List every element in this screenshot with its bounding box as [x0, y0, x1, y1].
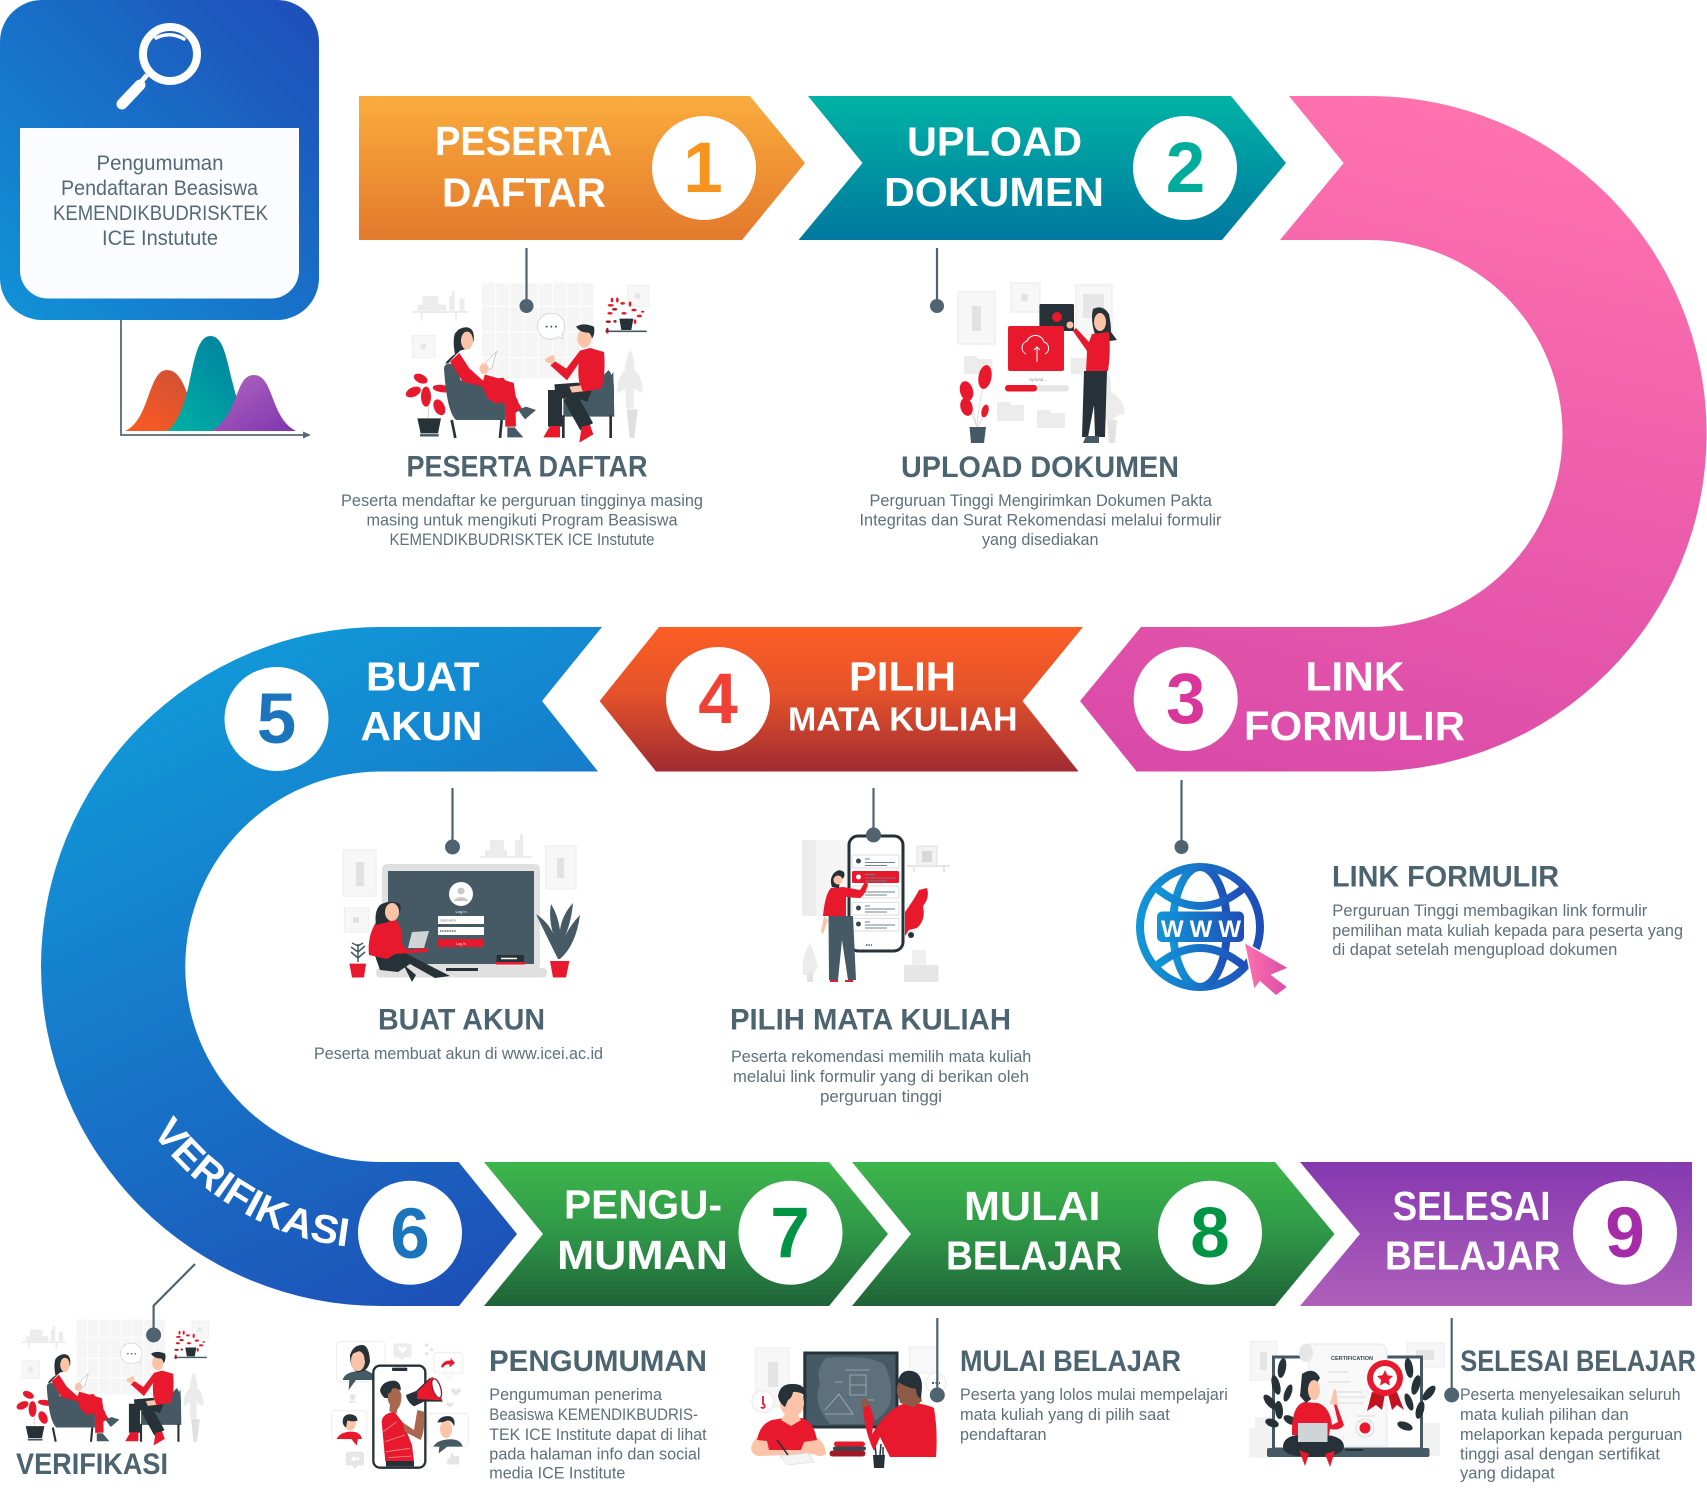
illustration: consultation for Peserta Daftar	[404, 283, 649, 443]
text block: Mulai Belajar: pendaftaran	[960, 1426, 1046, 1444]
step 2 banner: Upload Dokumen	[798, 96, 1286, 240]
connector pin: step 6	[146, 1264, 195, 1342]
text block: Pengumuman	[489, 1345, 707, 1483]
panel: announcement card	[0, 0, 319, 320]
step 4 banner: Pilih Mata Kuliah: MATA KULIAH	[788, 700, 1018, 738]
text block: Selesai Belajar: yang didapat	[1460, 1465, 1555, 1483]
step 3 banner: Link Formulir curve	[1080, 96, 1707, 772]
text block: Selesai Belajar: Peserta menyelesaikan seluruh	[1460, 1386, 1680, 1404]
step 1 banner: Peserta Daftar: DAFTAR	[442, 170, 606, 216]
step 5 and 6 banner: Buat Akun and Verifikasi curve: BUAT	[366, 654, 480, 700]
text block: Selesai Belajar: mata kuliah pilihan dan	[1460, 1406, 1629, 1424]
illustration: create account on laptop: Username	[440, 918, 456, 922]
text block: Pilih Mata Kuliah: PILIH MATA KULIAH	[730, 1004, 1011, 1036]
text block: Mulai Belajar	[960, 1345, 1228, 1444]
illustration: upload documents: Upload...	[1029, 377, 1047, 382]
text block: Peserta Daftar: Peserta mendaftar ke perguruan tingginya masing	[341, 492, 703, 510]
connector pin: step 2	[930, 248, 944, 313]
text block: Upload Dokumen	[860, 451, 1222, 549]
text block: Peserta Daftar	[341, 450, 703, 549]
card text: ICE Instutute	[102, 227, 218, 250]
icon: www globe with cursor	[1140, 867, 1289, 996]
text block: Pengumuman: Beasiswa KEMENDIKBUDRIS-	[489, 1406, 698, 1424]
text block: Selesai Belajar: melaporkan kepada perguruan	[1460, 1426, 1682, 1444]
text block: Pengumuman: Pengumuman penerima	[489, 1386, 663, 1404]
icon: magnifying glass	[122, 27, 197, 104]
text block: Pengumuman: media ICE Institute	[489, 1465, 625, 1483]
illustration: certificate on laptop	[1249, 1342, 1444, 1467]
text block: Pengumuman: pada halaman info dan social	[489, 1445, 700, 1463]
illustration: create account on laptop: Log In	[455, 909, 467, 914]
step 9 banner: Selesai Belajar	[1300, 1162, 1692, 1306]
text block: Pengumuman: TEK ICE Institute dapat di lihat	[489, 1426, 707, 1444]
card white text panel	[20, 128, 299, 298]
step 5 and 6 banner: Buat Akun and Verifikasi curve: 5	[257, 680, 296, 759]
step 9 banner: Selesai Belajar: 9	[1605, 1194, 1645, 1273]
step 5 and 6 banner: Buat Akun and Verifikasi curve: AKUN	[360, 703, 482, 749]
text block: Selesai Belajar	[1460, 1345, 1696, 1483]
text block: Link Formulir: LINK FORMULIR	[1332, 860, 1559, 894]
step 8 banner: Mulai Belajar: 8	[1190, 1194, 1230, 1273]
text block: Upload Dokumen: Perguruan Tinggi Mengirimkan Dokumen Pakta	[870, 492, 1213, 510]
illustration: upload documents	[958, 283, 1125, 443]
step 3 banner: Link Formulir curve: FORMULIR	[1244, 703, 1465, 749]
step 4 banner: Pilih Mata Kuliah: 4	[698, 660, 738, 739]
connector pin: step 9	[1444, 1318, 1459, 1402]
step 3 banner: Link Formulir curve: 3	[1166, 660, 1205, 739]
step 9 banner: Selesai Belajar: BELAJAR	[1385, 1232, 1560, 1278]
step 4 banner: Pilih Mata Kuliah: PILIH	[849, 654, 956, 700]
text block: Peserta Daftar: PESERTA DAFTAR	[406, 450, 648, 484]
step 2 banner: Upload Dokumen: DOKUMEN	[884, 169, 1104, 215]
connector pin: step 4	[866, 788, 881, 842]
illustration: create account on laptop	[343, 834, 580, 982]
text block: Pilih Mata Kuliah: melalui link formulir yang di berikan oleh	[733, 1068, 1029, 1086]
step 8 banner: Mulai Belajar: BELAJAR	[946, 1232, 1122, 1278]
connector pin: step 5	[445, 788, 460, 854]
illustration: students at blackboard	[751, 1347, 946, 1468]
text block: Link Formulir: di dapat setelah mengupload dokumen	[1332, 941, 1617, 959]
connector pin: step 8	[930, 1318, 945, 1402]
step 9 banner: Selesai Belajar: SELESAI	[1392, 1183, 1550, 1229]
card text: KEMENDIKBUDRISKTEK	[53, 202, 268, 225]
text block: Link Formulir: pemilihan mata kuliah kepada para peserta yang	[1332, 922, 1683, 940]
step 5 and 6 banner: Buat Akun and Verifikasi curve: VERIFIKASI	[158, 1115, 348, 1246]
step 7 banner: Pengumuman: PENGU-	[564, 1182, 722, 1228]
card text: Pendaftaran Beasiswa	[61, 177, 258, 200]
text block: Link Formulir	[1332, 860, 1683, 959]
step 8 banner: Mulai Belajar	[852, 1162, 1334, 1306]
illustration: choose courses on phone	[802, 836, 950, 982]
text block: Link Formulir: Perguruan Tinggi membagikan link formulir	[1332, 902, 1648, 920]
step 8 banner: Mulai Belajar: MULAI	[964, 1183, 1100, 1229]
text block: Buat Akun: Peserta membuat akun di www.icei.ac.id	[314, 1045, 603, 1063]
text block: Pilih Mata Kuliah: perguruan tinggi	[820, 1088, 942, 1106]
text block: Peserta Daftar: masing untuk mengikuti Program Beasiswa	[366, 512, 678, 530]
text block: Pengumuman: PENGUMUMAN	[489, 1345, 707, 1378]
step 7 banner: Pengumuman: MUMAN	[557, 1232, 728, 1278]
step 4 banner: Pilih Mata Kuliah	[600, 627, 1083, 772]
text block: Mulai Belajar: mata kuliah yang di pilih saat	[960, 1406, 1170, 1424]
text block: Buat Akun: BUAT AKUN	[378, 1004, 545, 1036]
step 7 banner: Pengumuman	[484, 1162, 888, 1306]
chart: distribution curves	[121, 320, 311, 438]
text block: Upload Dokumen: UPLOAD DOKUMEN	[901, 451, 1179, 484]
step 2 banner: Upload Dokumen: UPLOAD	[907, 118, 1082, 164]
text block: Upload Dokumen: yang disediakan	[982, 531, 1098, 549]
card text	[53, 152, 268, 250]
connector pin: step 3	[1174, 780, 1188, 854]
text block: Pilih Mata Kuliah: Peserta rekomendasi memilih mata kuliah	[731, 1048, 1031, 1066]
text block: Selesai Belajar: tinggi asal dengan sertifikat	[1460, 1445, 1660, 1463]
illustration: verification consultation	[15, 1320, 208, 1445]
card text: Pengumuman	[96, 152, 224, 175]
step 1 banner: Peserta Daftar: 1	[683, 129, 723, 208]
heading: Verifikasi: VERIFIKASI	[16, 1448, 168, 1481]
step 5 and 6 banner: Buat Akun and Verifikasi curve: 6	[390, 1195, 430, 1274]
text block: Peserta Daftar: KEMENDIKBUDRISKTEK ICE Instutute	[390, 531, 654, 549]
text block: Mulai Belajar: Peserta yang lolos mulai mempelajari	[960, 1386, 1228, 1404]
illustration: certificate on laptop: CERTIFICATION	[1331, 1356, 1373, 1362]
illustration: announcement with megaphone	[332, 1342, 468, 1469]
step 1 banner: Peserta Daftar	[359, 96, 805, 240]
card background	[0, 0, 319, 320]
text block: Buat Akun	[314, 1004, 603, 1063]
step 1 banner: Peserta Daftar: PESERTA	[435, 118, 612, 164]
text block: Pilih Mata Kuliah	[730, 1004, 1031, 1106]
step 5 and 6 banner: Buat Akun and Verifikasi curve	[41, 627, 602, 1306]
illustration: create account on laptop: Log In	[456, 942, 466, 946]
step 2 banner: Upload Dokumen: 2	[1166, 129, 1205, 208]
step 3 banner: Link Formulir curve: LINK	[1306, 654, 1405, 700]
icon: www globe with cursor: WWW	[1161, 916, 1241, 943]
text block: Upload Dokumen: Integritas dan Surat Rekomendasi melalui formulir	[860, 512, 1222, 530]
text block: Mulai Belajar: MULAI BELAJAR	[960, 1345, 1181, 1378]
step 7 banner: Pengumuman: 7	[770, 1194, 810, 1273]
connector pin: step 1	[520, 248, 534, 313]
